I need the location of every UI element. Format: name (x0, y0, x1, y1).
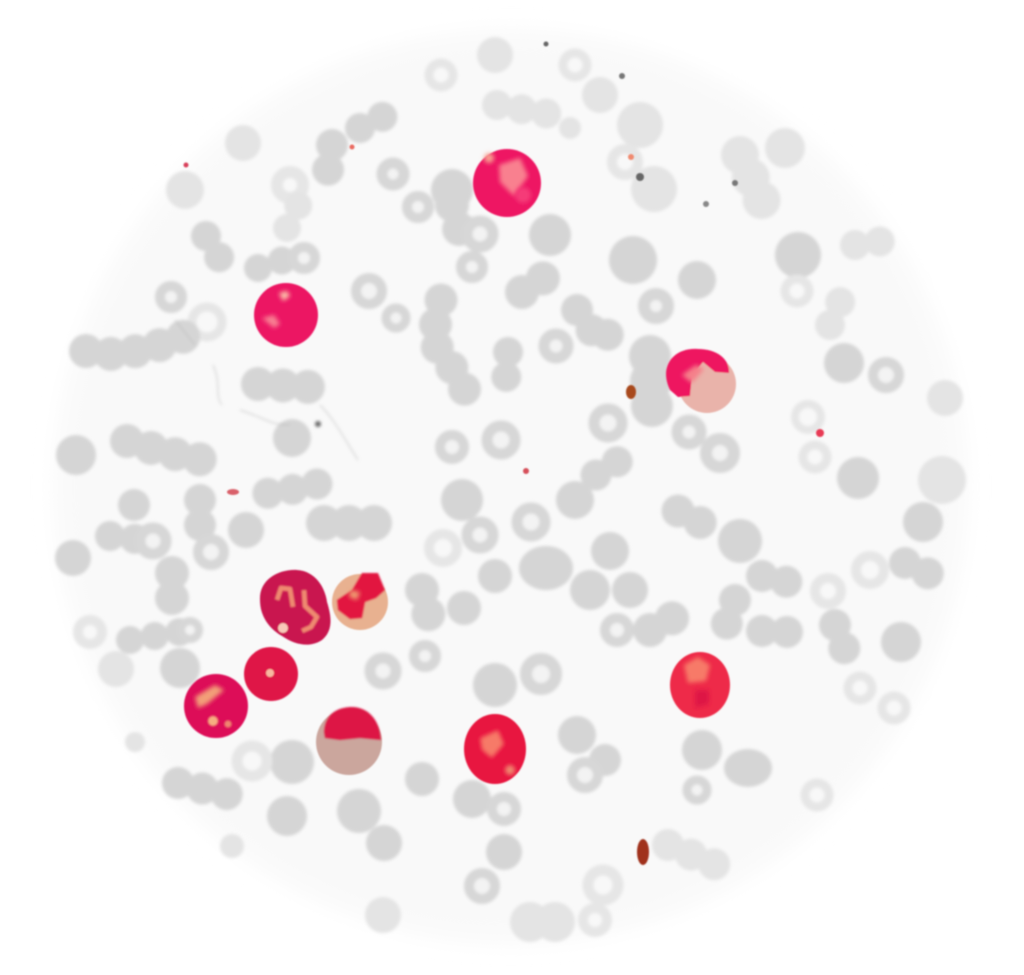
stained cell: right, half pale (666, 349, 736, 413)
stained cell: small round (244, 647, 298, 701)
stained cell: upper left (254, 283, 318, 347)
stained cell: large dark cell (260, 570, 331, 645)
stained cell: lower right (670, 652, 730, 718)
stained cell: bottom centre (464, 714, 526, 784)
stained cell: bottom, half pale (316, 707, 382, 775)
stained cell: tan cell with red nucleus (332, 573, 388, 630)
stained cell: top (473, 149, 541, 217)
small debris and platelets (184, 42, 824, 865)
stained cell: lower left (184, 674, 248, 738)
